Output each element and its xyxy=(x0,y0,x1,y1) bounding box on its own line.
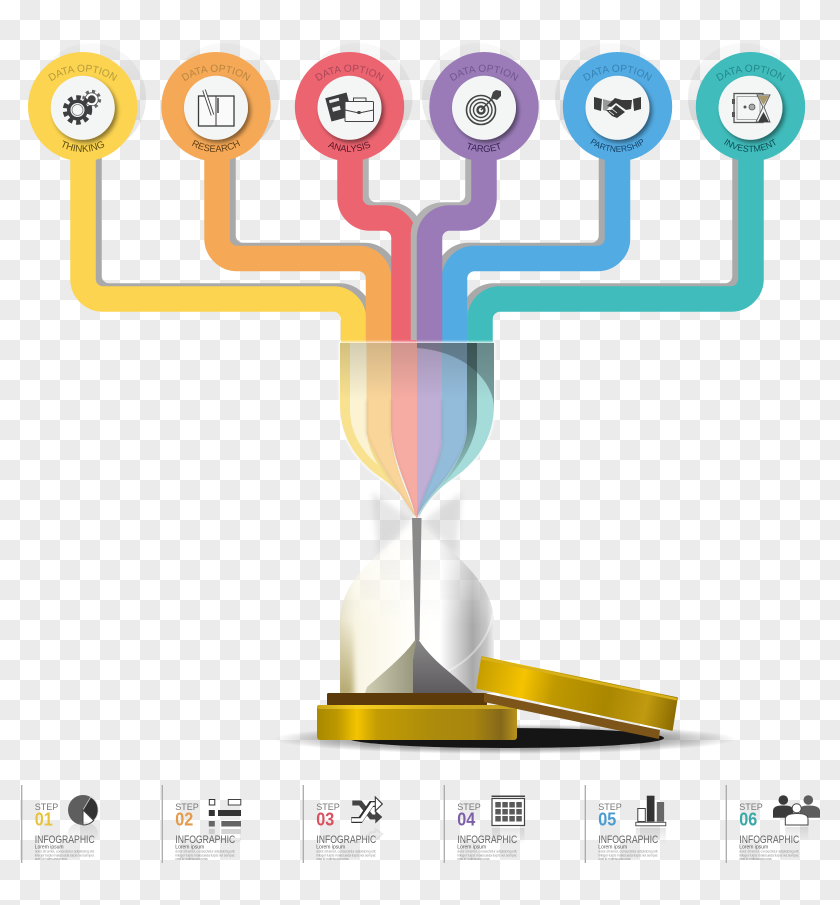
badge: analysis: ANALYSIS xyxy=(328,142,370,152)
badge: analysis xyxy=(294,52,404,160)
step 01 text: integer turpis malesuada turpis vel semper. xyxy=(35,854,95,858)
hourglass: falling sand stream xyxy=(412,518,422,640)
step 01 text: Lorem ipsum xyxy=(35,844,64,850)
pipe: orange research xyxy=(217,147,384,343)
icon: documents and briefcase xyxy=(325,93,374,122)
icon: list xyxy=(209,800,241,843)
step 01 text: INFOGRAPHIC xyxy=(35,834,95,846)
step 03 text: dolor sit amet, consectetur adipisicing elit. xyxy=(316,850,376,854)
step 06 xyxy=(726,785,820,863)
badge: research: DATA OPTION xyxy=(182,64,250,81)
badge: investment xyxy=(696,52,806,160)
badge: target: DATA OPTION xyxy=(450,64,518,81)
step 05 text: integer turpis malesuada turpis vel semper. xyxy=(598,854,659,858)
step 06 text: 06 xyxy=(739,810,757,830)
step 02 text: dolor sit amet, consectetur adipisicing elit. xyxy=(175,850,235,854)
step 03 text: STEP xyxy=(316,802,340,812)
step 04 xyxy=(444,785,525,863)
ghost circles behind badges xyxy=(36,43,798,153)
step 03 text: integer turpis malesuada turpis vel semper. xyxy=(316,854,377,858)
base: gold disc xyxy=(317,705,517,740)
step 03 text: 03 xyxy=(316,810,334,830)
badge: analysis: DATA OPTION xyxy=(315,64,384,81)
step 01 text: STEP xyxy=(35,802,58,812)
badge: investment: INVESTMENT xyxy=(724,138,776,152)
step 05 xyxy=(585,785,666,863)
lid: brown underside xyxy=(484,693,660,739)
step 01 text xyxy=(35,802,95,861)
icon: safe and hourglass xyxy=(732,94,770,122)
step 02 text: integer turpis malesuada turpis vel semper. xyxy=(175,854,236,858)
ground shadow xyxy=(273,724,737,754)
step 05 text xyxy=(598,802,659,861)
icon: shuffle arrows xyxy=(351,797,382,842)
step 02 text: cras id malesuada urna. xyxy=(175,857,208,861)
icon: pie chart xyxy=(68,795,98,844)
icon: people group xyxy=(773,795,820,841)
step 04 text: integer turpis malesuada turpis vel semper. xyxy=(457,854,518,858)
step 05 text: INFOGRAPHIC xyxy=(598,834,658,846)
step 03 text: INFOGRAPHIC xyxy=(316,834,376,846)
badge: thinking xyxy=(28,52,138,160)
step 04 text: STEP xyxy=(457,802,481,812)
base: dark plate xyxy=(327,693,487,706)
hourglass: sand pile xyxy=(365,637,473,693)
icon: gears xyxy=(66,92,99,122)
pipe: red analysis xyxy=(350,147,410,343)
step 05 text: STEP xyxy=(598,802,622,812)
pipe: yellow thinking xyxy=(83,147,360,343)
badge: research xyxy=(161,52,271,160)
pipe: purple target xyxy=(424,147,484,343)
step 06 text: STEP xyxy=(739,802,763,812)
icon: handshake xyxy=(594,97,641,118)
pipe: teal investment xyxy=(474,147,751,343)
step 06 text: INFOGRAPHIC xyxy=(739,834,799,846)
icon: notebook and pen xyxy=(198,90,234,126)
step 04 text: cras id malesuada urna. xyxy=(457,857,490,861)
step 06 text xyxy=(739,802,800,861)
step 05 text: Lorem ipsum xyxy=(598,844,627,850)
step 04 text: dolor sit amet, consectetur adipisicing elit. xyxy=(457,850,517,854)
badge: investment: DATA OPTION xyxy=(716,64,785,81)
step 06 text: Lorem ipsum xyxy=(739,844,768,850)
icon: target with arrow xyxy=(466,90,501,124)
icon: bar chart xyxy=(636,796,666,844)
hourglass: upper bulb with coloured bands xyxy=(340,343,494,519)
step 05 text: 05 xyxy=(598,810,616,830)
step 01 text: dolor sit amet, consectetur adipisicing elit. xyxy=(35,850,95,854)
hourglass xyxy=(273,343,737,754)
icon: calendar grid xyxy=(492,796,525,844)
ribbon pipes xyxy=(83,147,751,343)
step 01 xyxy=(22,785,98,863)
badge: research: RESEARCH xyxy=(192,140,240,152)
pipe: blue partnership xyxy=(448,147,618,343)
step 02 xyxy=(162,785,241,863)
hourglass: neck haze xyxy=(372,492,462,556)
badge: thinking: THINKING xyxy=(62,140,104,152)
step 04 text: INFOGRAPHIC xyxy=(457,834,517,846)
step 01 text: cras id malesuada urna. xyxy=(35,857,68,861)
step 03 text: cras id malesuada urna. xyxy=(316,857,349,861)
step 02 text: STEP xyxy=(175,802,199,812)
hourglass: lower bulb xyxy=(340,553,494,693)
badge: partnership: PARTNERSHIP xyxy=(590,138,643,152)
badge: target: TARGET xyxy=(468,142,500,152)
badge: partnership: DATA OPTION xyxy=(583,64,652,81)
step 02 text: Lorem ipsum xyxy=(175,844,204,850)
step 04 text: Lorem ipsum xyxy=(457,844,486,850)
step 02 text xyxy=(175,802,236,861)
step 01 text: 01 xyxy=(35,810,53,830)
step 02 text: INFOGRAPHIC xyxy=(175,834,235,846)
step 05 text: dolor sit amet, consectetur adipisicing elit. xyxy=(598,850,658,854)
step 06 text: integer turpis malesuada turpis vel semper. xyxy=(739,854,800,858)
lid: gold disc xyxy=(477,657,677,730)
step 04 text xyxy=(457,802,518,861)
badge: partnership xyxy=(562,52,672,160)
badge: target xyxy=(429,52,539,160)
step 04 text: 04 xyxy=(457,810,475,830)
step 05 text: cras id malesuada urna. xyxy=(598,857,631,861)
step 06 text: cras id malesuada urna. xyxy=(739,857,772,861)
step 06 text: dolor sit amet, consectetur adipisicing elit. xyxy=(739,850,799,854)
badge: thinking: DATA OPTION xyxy=(48,64,118,81)
step 03 text xyxy=(316,802,377,861)
step 03 xyxy=(303,785,382,863)
step 02 text: 02 xyxy=(175,810,193,830)
step 03 text: Lorem ipsum xyxy=(316,844,345,850)
